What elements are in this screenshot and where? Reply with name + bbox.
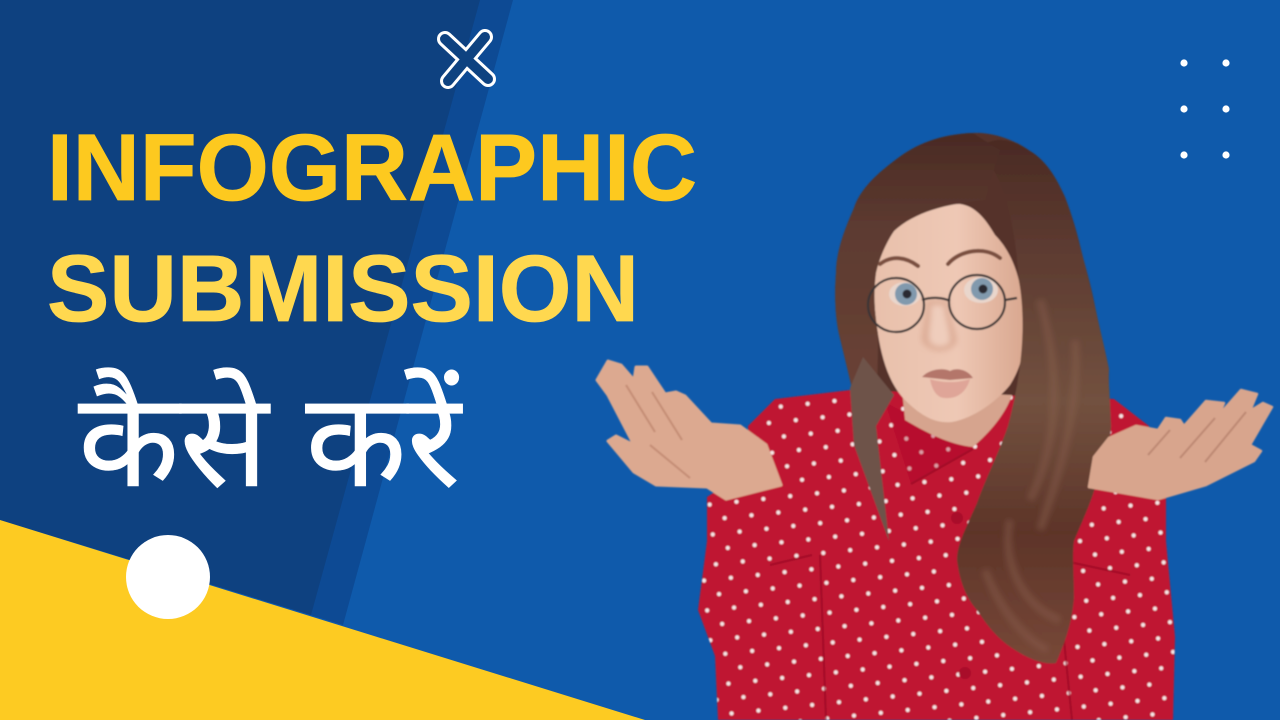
panel: dark blue diagonal band bbox=[0, 0, 480, 615]
face bbox=[875, 204, 1024, 422]
eyebrows bbox=[880, 251, 1000, 266]
icon: dot grid bbox=[1180, 59, 1230, 159]
glasses bbox=[868, 275, 1017, 332]
nose bbox=[922, 300, 957, 351]
eyes bbox=[889, 277, 998, 306]
right hand bbox=[1089, 390, 1272, 499]
title line 2: SUBMISSION bbox=[47, 236, 639, 342]
hair front right and long curl bbox=[957, 140, 1111, 663]
hair back bbox=[835, 133, 1111, 440]
hair left strand bbox=[850, 357, 894, 541]
icon: outlined cross bbox=[445, 37, 488, 81]
shirt bbox=[698, 390, 1175, 720]
panel: medium blue diagonal band bbox=[0, 0, 513, 625]
panel: yellow corner triangle bbox=[0, 520, 645, 720]
mouth bbox=[922, 369, 973, 398]
subtitle in Hindi: कैसे करें bbox=[78, 367, 463, 514]
icon: white circle bbox=[126, 535, 210, 619]
illustration: woman shrugging bbox=[597, 133, 1272, 720]
hair top left bbox=[835, 133, 1000, 395]
title line 1: INFOGRAPHIC bbox=[47, 115, 697, 221]
left hand bbox=[597, 361, 781, 499]
neck bbox=[902, 390, 1012, 447]
